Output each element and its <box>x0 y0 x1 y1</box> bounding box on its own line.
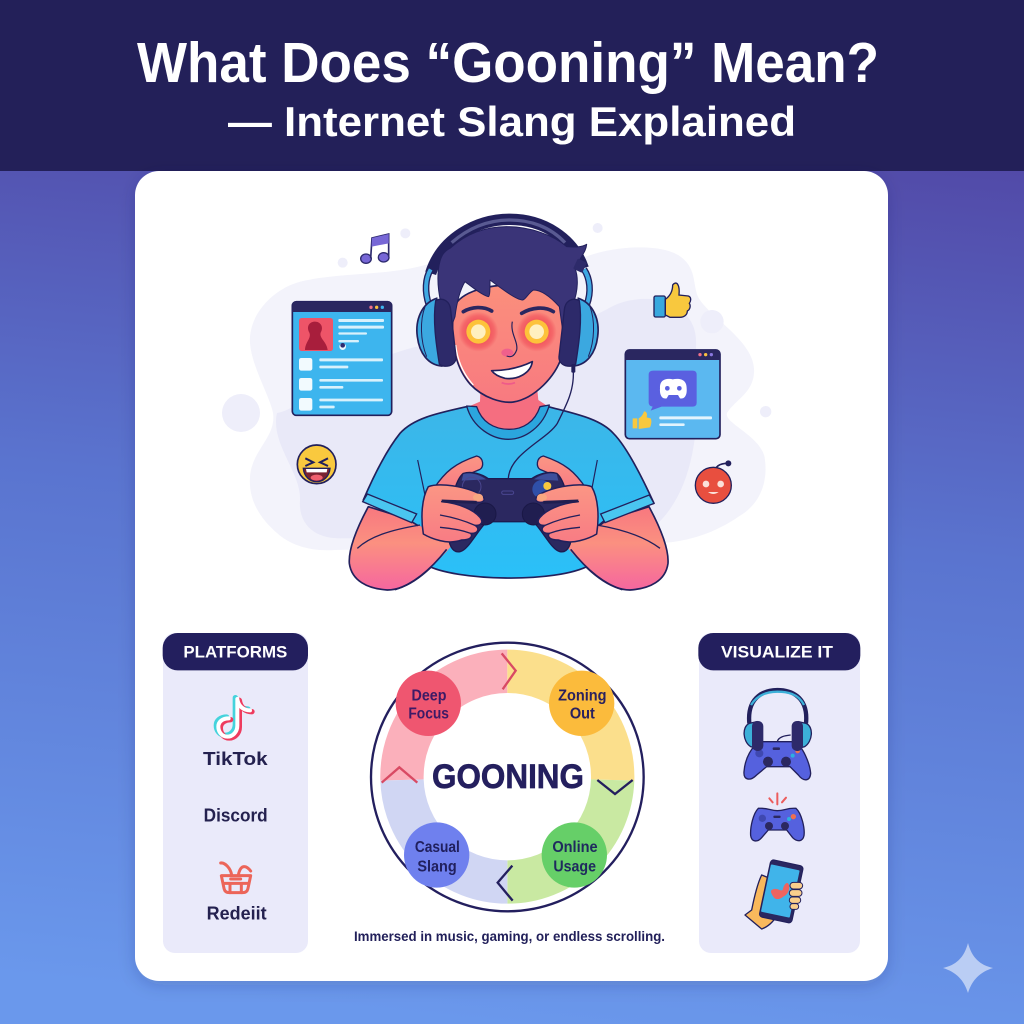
hair <box>438 227 587 335</box>
visualize heading pill: VISUALIZE IT <box>721 643 833 662</box>
forearms over shirt <box>357 525 660 590</box>
icon: thumbs up <box>654 283 691 317</box>
shirt collar <box>467 405 549 439</box>
decorative dots <box>222 223 771 432</box>
outer ring line <box>371 643 644 911</box>
node: online usage: Usage <box>553 858 596 875</box>
node: zoning out: Out <box>570 706 595 723</box>
icon: laughing emoji <box>297 445 336 484</box>
icon: TikTok note <box>216 698 252 738</box>
right hand <box>536 485 598 542</box>
TikTok label: TikTok <box>203 748 268 769</box>
right ear cup <box>559 298 598 366</box>
left ear cup <box>417 298 456 366</box>
node: deep focus: Deep <box>411 687 447 704</box>
game controller <box>448 472 572 552</box>
headset cable <box>508 364 575 478</box>
node: online usage <box>542 822 607 888</box>
right app window: chat <box>625 350 720 439</box>
neck <box>468 383 548 431</box>
segment: yellow <box>507 671 613 780</box>
platforms heading pill: PLATFORMS <box>183 643 287 662</box>
node: deep focus: Focus <box>408 706 449 723</box>
back fingers left <box>434 456 483 488</box>
icon: alien robot <box>695 460 731 503</box>
node: casual slang <box>404 822 469 888</box>
segment: green <box>507 780 613 882</box>
glowing eyes <box>458 312 557 352</box>
cycle diagram <box>371 643 644 911</box>
back fingers right <box>537 456 586 488</box>
icon: phone in hand <box>745 859 804 929</box>
node: deep focus <box>396 671 461 736</box>
panel: visualize it <box>698 633 860 953</box>
node: online usage: Online <box>552 839 598 856</box>
Reddit label: Redeiit <box>207 903 267 924</box>
arm: right <box>569 507 668 590</box>
chat icon <box>649 371 697 411</box>
segment: lavender <box>402 780 507 882</box>
icon: sparkle <box>943 943 993 993</box>
node: zoning out: Zoning <box>558 687 606 704</box>
Discord label: Discord <box>204 805 268 826</box>
visualize heading pill <box>698 633 860 670</box>
icon: music note <box>361 234 389 263</box>
node: zoning out <box>549 671 614 736</box>
arm: left <box>349 507 448 590</box>
center label: GOONING <box>432 758 584 796</box>
node: casual slang: Casual <box>415 839 460 856</box>
caption: Immersed in music, gaming, or endless scrolling. <box>354 928 665 944</box>
background blobs <box>250 247 766 550</box>
t-shirt <box>363 407 654 578</box>
left hand <box>422 485 484 542</box>
main card <box>135 171 888 981</box>
icon: Reddit basket <box>221 863 251 893</box>
icon: headset and controller <box>744 690 811 780</box>
header band <box>0 0 1024 171</box>
headset bracket <box>573 258 587 273</box>
nose <box>501 349 513 357</box>
left app window <box>292 302 392 415</box>
head <box>453 285 567 402</box>
icon: controller with alert <box>751 793 804 841</box>
smile <box>492 362 532 379</box>
chevron arrows <box>382 653 633 901</box>
segment: pink <box>402 671 507 780</box>
node: casual slang: Slang <box>417 858 457 875</box>
title line 2: — Internet Slang Explained <box>228 98 796 145</box>
title line 1: What Does “Gooning” Mean? <box>137 31 879 95</box>
headset band <box>426 219 590 305</box>
hero illustration: gamer with headset <box>222 219 771 590</box>
platforms heading pill <box>163 633 308 670</box>
panel: platforms <box>163 633 308 953</box>
